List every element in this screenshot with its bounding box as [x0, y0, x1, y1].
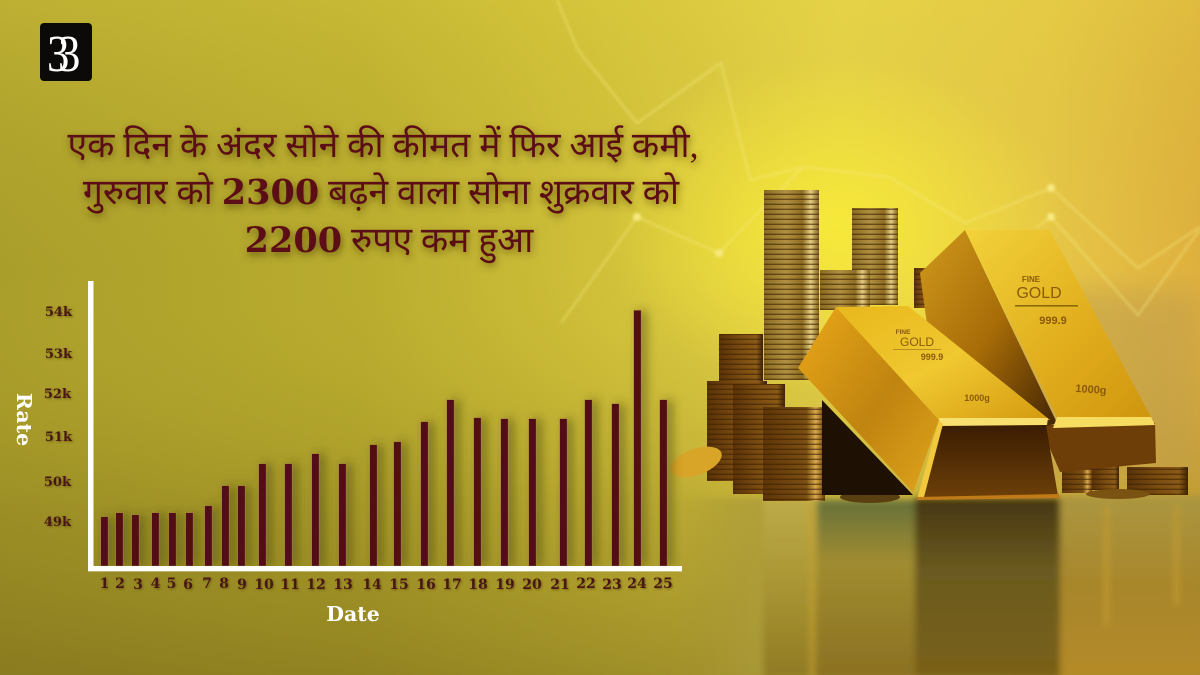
- x axis labels: 21: [550, 577, 570, 593]
- x axis labels: 16: [416, 577, 436, 593]
- left upper coin stack: [719, 334, 763, 382]
- x axis labels: 24: [627, 576, 647, 592]
- logo: 3: [58, 26, 80, 83]
- coin stacks: [666, 190, 1188, 503]
- axes: [88, 281, 682, 571]
- y axis labels: [44, 305, 73, 530]
- y axis labels: 51k: [45, 430, 73, 445]
- title: 2200 रुपए कम हुआ: [245, 220, 534, 264]
- gold bar: front: 1000g: [964, 393, 990, 403]
- right coin stack: [1062, 447, 1119, 493]
- x axis labels: 14: [362, 577, 382, 593]
- flat coins: [840, 489, 1150, 503]
- gold bar: back: [920, 230, 1156, 472]
- background trend lines: [557, 0, 1200, 323]
- front coin stack: [763, 407, 825, 501]
- left lower coin stack: [707, 381, 767, 481]
- logo: 3: [47, 26, 69, 83]
- x axis labels: 2: [115, 576, 125, 592]
- title: [67, 125, 699, 264]
- leaning coin: [666, 441, 726, 483]
- x axis labels: 3: [133, 577, 143, 593]
- bar chart: [12, 281, 682, 626]
- x axis labels: 22: [576, 576, 596, 592]
- gold bar: front: 999.9: [921, 352, 943, 362]
- x axis labels: 25: [653, 576, 673, 592]
- second coin stack: [852, 208, 898, 305]
- title: गुरुवार को 2300 बढ़ने वाला सोना शुक्रवार को: [83, 172, 680, 214]
- y axis labels: 54k: [45, 305, 73, 320]
- y axis title: Rate: [12, 393, 36, 446]
- x axis labels: [100, 576, 673, 593]
- gold bar: back: 1000g: [1075, 383, 1107, 397]
- x axis title: Date: [326, 602, 380, 626]
- x axis labels: 15: [389, 577, 409, 593]
- y axis labels: 49k: [44, 515, 72, 530]
- x axis labels: 7: [202, 576, 212, 592]
- gold bar: front: GOLD: [900, 335, 934, 349]
- x axis labels: 12: [306, 577, 326, 593]
- floor reflection: [670, 496, 1200, 675]
- gold bar: front: [798, 306, 1060, 500]
- x axis labels: 18: [468, 577, 488, 593]
- tall coin stack: [764, 190, 819, 380]
- y axis labels: 52k: [44, 387, 72, 402]
- y axis labels: 50k: [44, 475, 72, 490]
- x axis labels: 6: [183, 577, 193, 593]
- x axis labels: 23: [602, 577, 622, 593]
- x axis labels: 9: [237, 577, 247, 593]
- x axis labels: 13: [333, 577, 353, 593]
- bars: [101, 310, 667, 566]
- y axis labels: 53k: [45, 347, 73, 362]
- gold bar: front: FINE: [896, 329, 911, 336]
- x axis labels: 4: [151, 576, 161, 592]
- x axis labels: 11: [280, 577, 300, 593]
- title: एक दिन के अंदर सोने की कीमत में फिर आई कमी,: [67, 125, 699, 165]
- x axis labels: 19: [495, 577, 515, 593]
- far right coin stack: [1127, 467, 1188, 495]
- x axis labels: 1: [100, 576, 109, 592]
- x axis labels: 17: [442, 577, 462, 593]
- rear coin stack: [914, 268, 928, 308]
- logo: [40, 23, 92, 83]
- x axis labels: 8: [219, 576, 229, 592]
- gold bar: back: FINE: [1022, 275, 1041, 284]
- gold bar: back: GOLD: [1016, 285, 1062, 302]
- center lower coin stack: [733, 384, 785, 494]
- x axis labels: 10: [254, 577, 274, 593]
- x axis labels: 20: [522, 577, 542, 593]
- middle coin stack: [820, 270, 870, 310]
- gold bar: back: 999.9: [1039, 315, 1067, 327]
- x axis labels: 5: [167, 576, 176, 592]
